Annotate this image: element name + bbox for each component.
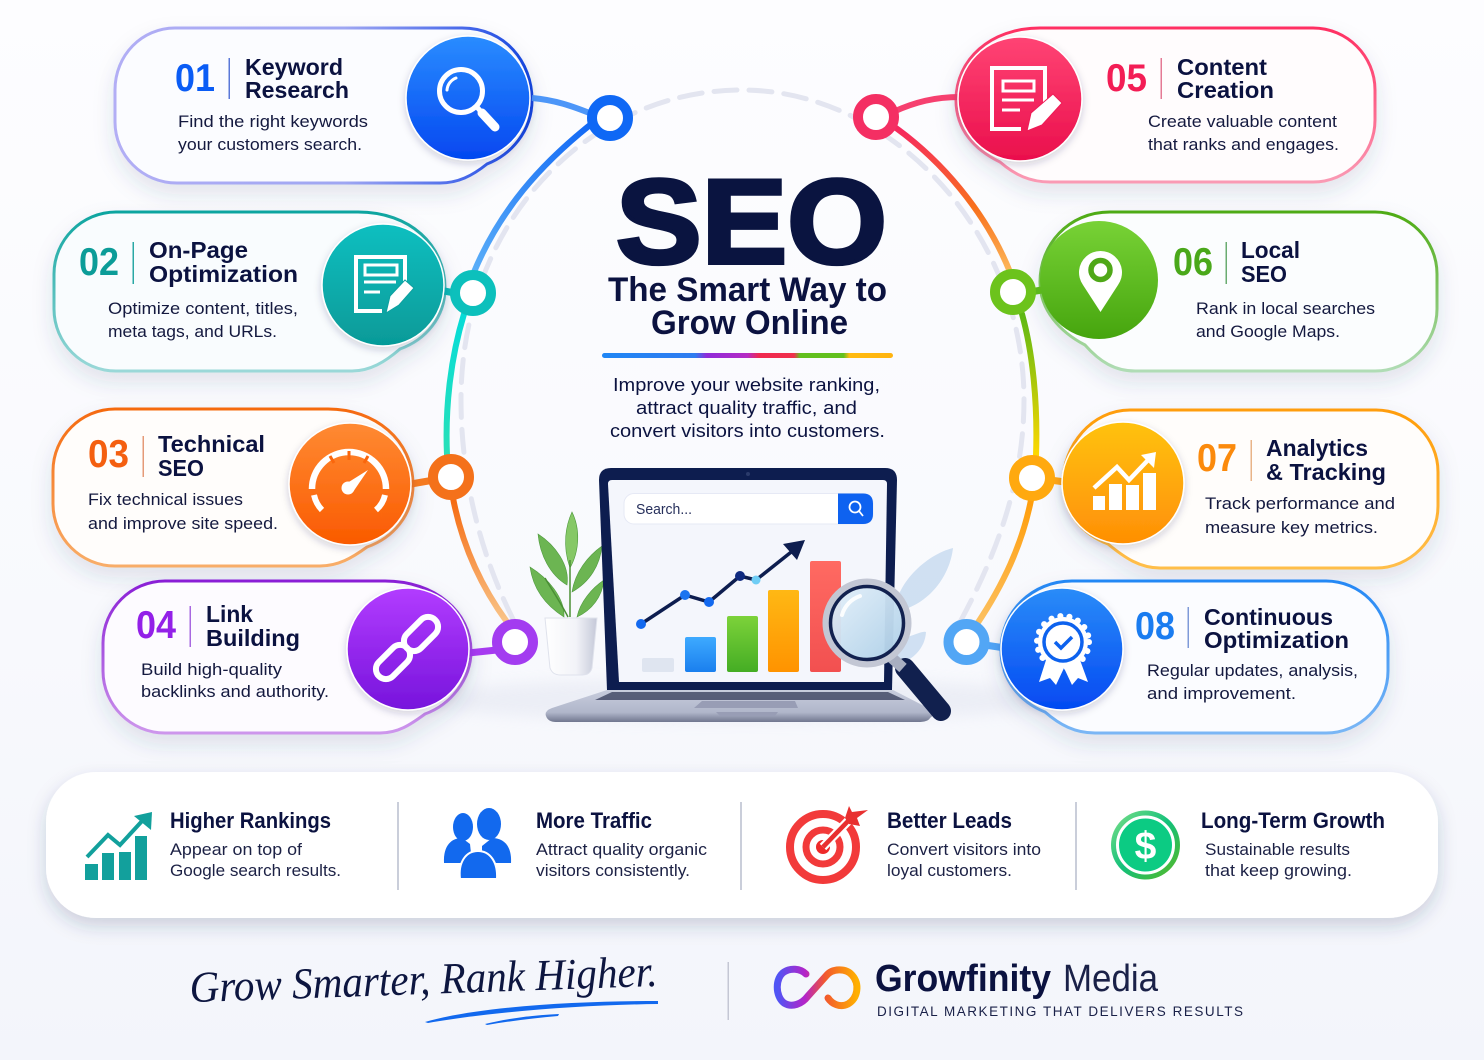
benefit: More Traffic: More Traffic xyxy=(536,808,652,833)
description 08: and improvement. xyxy=(1147,684,1296,703)
panel: 04 Link Building xyxy=(103,581,533,733)
number 02: 02 xyxy=(79,241,119,284)
search bar xyxy=(624,494,873,524)
slogan: Grow Smarter, Rank Higher. xyxy=(189,947,658,1012)
node 03 xyxy=(433,459,469,495)
description 06 xyxy=(1196,299,1375,341)
description 06: and Google Maps. xyxy=(1196,322,1340,341)
laptop screen bezel xyxy=(599,468,897,690)
number 07: 07 xyxy=(1197,437,1237,480)
plant leaves xyxy=(530,512,604,617)
node 01 xyxy=(592,100,628,136)
number 08: 08 xyxy=(1135,605,1175,648)
heading: Technical SEO xyxy=(158,431,265,481)
logo mark: infinity xyxy=(777,969,857,1006)
panel: benefits strip xyxy=(46,772,1438,918)
number 01: 01 xyxy=(175,57,215,100)
number 03: 03 xyxy=(88,433,129,476)
title: SEO: SEO xyxy=(616,155,887,289)
heading: Continuous Optimization: Optimization xyxy=(1204,627,1349,653)
heading: Content Creation: Content xyxy=(1177,54,1267,80)
slogan underline xyxy=(425,1001,658,1025)
heading: Link Building xyxy=(206,601,300,651)
logo name xyxy=(875,958,1159,1000)
benefit: Higher Rankings: Google search results. xyxy=(170,862,341,880)
benefit: Long-Term Growth xyxy=(1201,808,1385,880)
screen surface xyxy=(608,480,887,682)
illustration: potted plant xyxy=(530,512,604,675)
panel: 08 Continuous Optimization xyxy=(948,581,1388,733)
icon: rising bar chart xyxy=(1062,422,1184,544)
heading: Analytics & Tracking: & Tracking xyxy=(1266,459,1386,485)
icon: content document xyxy=(958,37,1082,161)
icon: dollar coin: $ xyxy=(1135,825,1157,868)
description 01: your customers search. xyxy=(178,135,362,154)
node 02 xyxy=(455,275,491,311)
node 07 xyxy=(1014,460,1050,496)
icon: teal rising chart xyxy=(85,812,152,880)
magnifying glass xyxy=(826,582,941,711)
benefit: Higher Rankings xyxy=(170,808,341,880)
heading: Continuous Optimization xyxy=(1204,604,1349,653)
description 03 xyxy=(88,490,278,533)
illustration: laptop with search and chart xyxy=(546,468,941,722)
icon: award ribbon xyxy=(1001,588,1123,710)
heading: Local SEO: SEO xyxy=(1241,261,1287,287)
heading: Analytics & Tracking xyxy=(1266,435,1386,485)
description 01 xyxy=(178,112,368,154)
icon: chain link xyxy=(347,588,469,710)
node 04 xyxy=(497,624,533,660)
heading: Keyword Research: Keyword xyxy=(245,54,343,80)
node 05 xyxy=(858,99,894,135)
intro text: Improve your website ranking, xyxy=(613,375,880,395)
number 04: 04 xyxy=(136,604,176,647)
heading: Content Creation: Creation xyxy=(1177,77,1274,103)
intro text xyxy=(610,375,885,441)
description 04: Build high-quality xyxy=(141,660,283,679)
benefit: More Traffic: visitors consistently. xyxy=(536,862,690,880)
subtitle: Grow Online xyxy=(651,304,848,342)
trend line arrow xyxy=(636,540,805,629)
node 08 xyxy=(948,624,984,660)
bar chart xyxy=(642,561,841,672)
description 05 xyxy=(1148,112,1339,154)
description 02: meta tags, and URLs. xyxy=(108,322,277,341)
heading: On-Page Optimization xyxy=(149,237,298,287)
heading: Link Building: Building xyxy=(206,625,300,651)
description 07: Track performance and xyxy=(1205,494,1395,513)
description 04: backlinks and authority. xyxy=(141,682,329,701)
panel: 02 On-Page Optimization xyxy=(54,212,491,371)
description 02: Optimize content, titles, xyxy=(108,299,298,318)
heading: Link Building: Link xyxy=(206,601,254,627)
icon: target with arrow xyxy=(790,806,868,880)
heading: On-Page Optimization: On-Page xyxy=(149,237,248,263)
benefit: Higher Rankings: Appear on top of xyxy=(170,841,302,859)
illustration: background leaf xyxy=(893,548,953,664)
benefit: More Traffic xyxy=(536,808,707,880)
node 06 xyxy=(995,274,1031,310)
laptop base xyxy=(546,690,933,722)
description 08 xyxy=(1147,661,1358,703)
description 02 xyxy=(108,299,298,341)
heading: Local SEO: Local xyxy=(1241,237,1300,263)
logo name: Growfinity xyxy=(875,958,1051,1000)
benefit: Better Leads xyxy=(887,808,1041,880)
heading: Keyword Research xyxy=(245,54,349,103)
panel: 01 Keyword Research xyxy=(115,28,628,183)
description 07 xyxy=(1205,494,1395,537)
benefit: Higher Rankings: Higher Rankings xyxy=(170,808,331,833)
logo: Growfinity Media xyxy=(777,958,1243,1019)
subtitle xyxy=(608,271,887,342)
heading: Keyword Research: Research xyxy=(245,77,349,103)
description 07: measure key metrics. xyxy=(1205,518,1378,537)
benefit: Long-Term Growth: Long-Term Growth xyxy=(1201,808,1385,833)
subtitle: The Smart Way to xyxy=(608,271,887,309)
icon: document and pencil xyxy=(322,224,444,346)
benefit: Better Leads: loyal customers. xyxy=(887,862,1012,880)
logo tagline: DIGITAL MARKETING THAT DELIVERS RESULTS xyxy=(877,1004,1243,1019)
icon: people group xyxy=(444,808,511,879)
benefit: Long-Term Growth: Sustainable results xyxy=(1205,841,1350,859)
description 03: and improve site speed. xyxy=(88,514,278,533)
benefit: Better Leads: Convert visitors into xyxy=(887,841,1041,859)
heading: Content Creation xyxy=(1177,54,1274,103)
description 06: Rank in local searches xyxy=(1196,299,1375,318)
heading: Analytics & Tracking: Analytics xyxy=(1266,435,1368,461)
icon: magnifier xyxy=(406,36,530,160)
intro text: attract quality traffic, and xyxy=(636,398,857,418)
heading: On-Page Optimization: Optimization xyxy=(149,261,298,287)
icon: dollar coin xyxy=(1111,810,1180,880)
intro text: convert visitors into customers. xyxy=(610,421,885,441)
number 06: 06 xyxy=(1173,241,1213,284)
icon: speedometer xyxy=(289,423,411,545)
heading: Continuous Optimization: Continuous xyxy=(1204,604,1333,630)
heading: Local SEO xyxy=(1241,237,1300,287)
icon: map pin xyxy=(1040,221,1158,339)
panel: 06 Local SEO xyxy=(995,212,1437,371)
rainbow divider xyxy=(602,353,893,358)
description 05: Create valuable content xyxy=(1148,112,1337,131)
benefit: Long-Term Growth: that keep growing. xyxy=(1205,862,1352,880)
description 03: Fix technical issues xyxy=(88,490,243,509)
description 05: that ranks and engages. xyxy=(1148,135,1339,154)
logo name: Media xyxy=(1063,958,1159,1000)
arc: left ring segments xyxy=(447,125,590,622)
panel: 03 Technical SEO xyxy=(53,409,469,566)
number 05: 05 xyxy=(1106,57,1147,100)
heading: Technical SEO: SEO xyxy=(158,455,204,481)
search bar: Search... xyxy=(636,502,692,518)
description 01: Find the right keywords xyxy=(178,112,368,131)
heading: Technical SEO: Technical xyxy=(158,431,265,457)
description 08: Regular updates, analysis, xyxy=(1147,661,1358,680)
description 04 xyxy=(141,660,329,701)
plant pot xyxy=(545,618,597,675)
benefit: Better Leads: Better Leads xyxy=(887,808,1012,833)
panel: 07 Analytics & Tracking xyxy=(1014,410,1438,568)
panel: 05 Content Creation xyxy=(858,28,1375,182)
benefit: More Traffic: Attract quality organic xyxy=(536,841,707,859)
arc: right ring segments xyxy=(896,128,1036,624)
